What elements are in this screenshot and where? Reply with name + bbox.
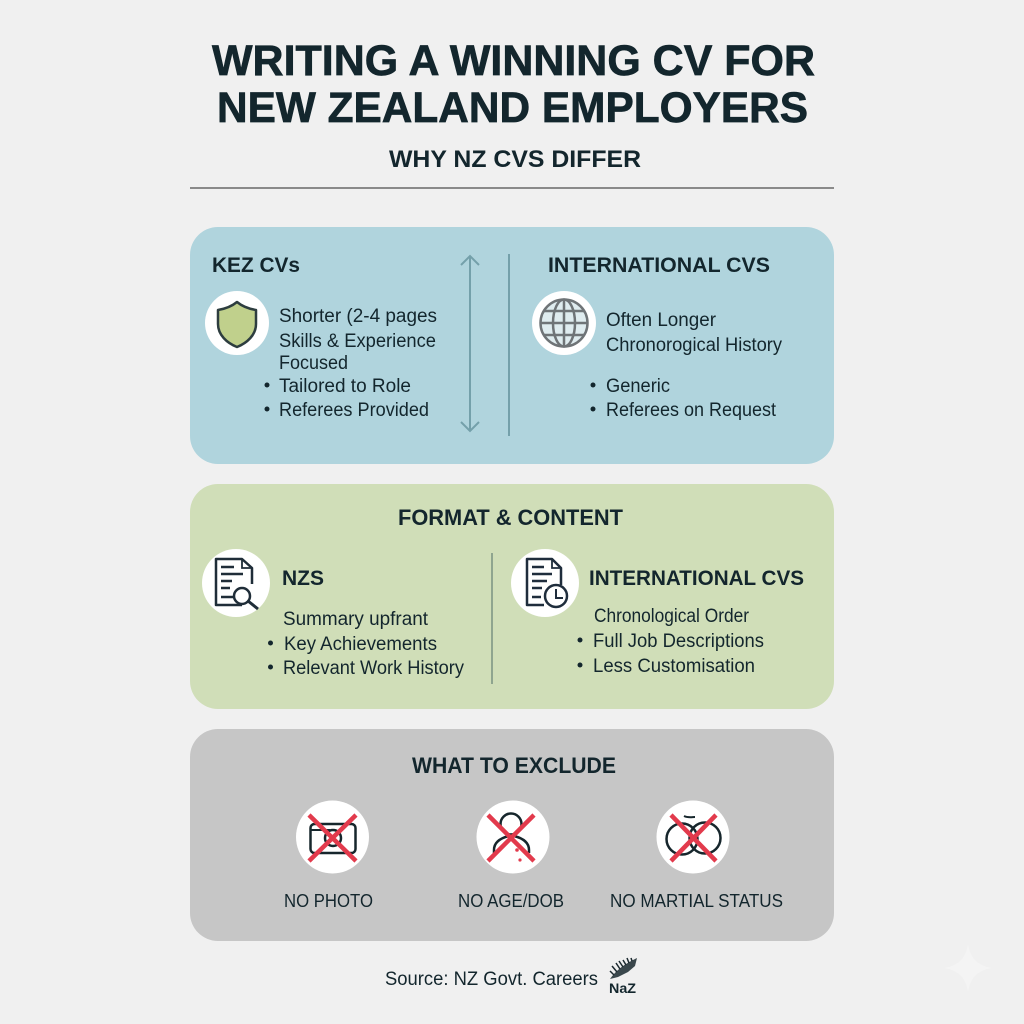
list: NZS: Key Achievements: [284, 634, 437, 655]
icon: document with magnifier: [202, 549, 270, 617]
list: international CVs: Referees on Request: [606, 400, 777, 421]
icon: document with clock: [511, 549, 579, 617]
list: international CVs: Often Longer: [606, 310, 717, 331]
title: [212, 37, 815, 132]
heading: what to exclude: WHAT TO EXCLUDE: [412, 753, 616, 778]
source line: Source: NZ Govt. Careers: [385, 969, 598, 990]
heading: NZS: NZS: [282, 567, 324, 590]
list: international format: Less Customisation: [593, 656, 755, 677]
list: international CVs: Generic: [606, 376, 670, 397]
label: no photo: NO PHOTO: [284, 891, 373, 911]
label: no age: NO AGE/DOB: [458, 891, 564, 911]
label: no marital status: NO MARTIAL STATUS: [610, 891, 783, 911]
heading: format and content: FORMAT & CONTENT: [398, 505, 624, 530]
subtitle: WHY NZ CVS DIFFER: [389, 146, 641, 173]
icon: no photo: [296, 800, 369, 874]
list: KEZ CVs: Referees Provided: [279, 400, 429, 421]
panel: format and content: [190, 484, 834, 709]
heading: international CVs: INTERNATIONAL CVS: [548, 254, 770, 277]
icon: no age: [476, 800, 550, 874]
list: NZS: Summary upfrant: [283, 609, 429, 630]
list: KEZ CVs: Shorter (2-4 pages: [279, 306, 437, 327]
title: NEW ZEALAND EMPLOYERS: [217, 84, 808, 132]
icon: no marital status: [656, 800, 730, 874]
icon: sparkle watermark: [944, 944, 992, 992]
heading: KEZ CVs: KEZ CVs: [212, 254, 300, 277]
list: KEZ CVs: Skills & Experience: [279, 331, 436, 352]
icon: globe: [532, 291, 596, 355]
panel: why NZ CVs differ: [190, 227, 834, 464]
list: NZS: [268, 609, 464, 679]
list: KEZ CVs: Tailored to Role: [279, 376, 411, 397]
list: international CVs: [590, 310, 782, 421]
list: NZS: Relevant Work History: [283, 658, 464, 679]
list: KEZ CVs: Focused: [279, 353, 348, 374]
icon: silver fern logo: [609, 958, 637, 996]
list: international format: Chronological Order: [594, 606, 750, 627]
title: WRITING A WINNING CV FOR: [212, 37, 815, 85]
list: KEZ CVs: [264, 306, 437, 421]
list: international format: Full Job Descriptions: [593, 631, 764, 652]
heading: international CVs format: INTERNATIONAL CVS: [589, 567, 804, 590]
list: international format: [578, 606, 764, 677]
arrow: double-headed vertical: [461, 256, 479, 431]
icon: shield: [205, 291, 269, 355]
panel: what to exclude: [190, 729, 834, 941]
icon: silver fern logo: NaZ: [609, 980, 636, 996]
list: international CVs: Chronorogical History: [606, 335, 782, 356]
